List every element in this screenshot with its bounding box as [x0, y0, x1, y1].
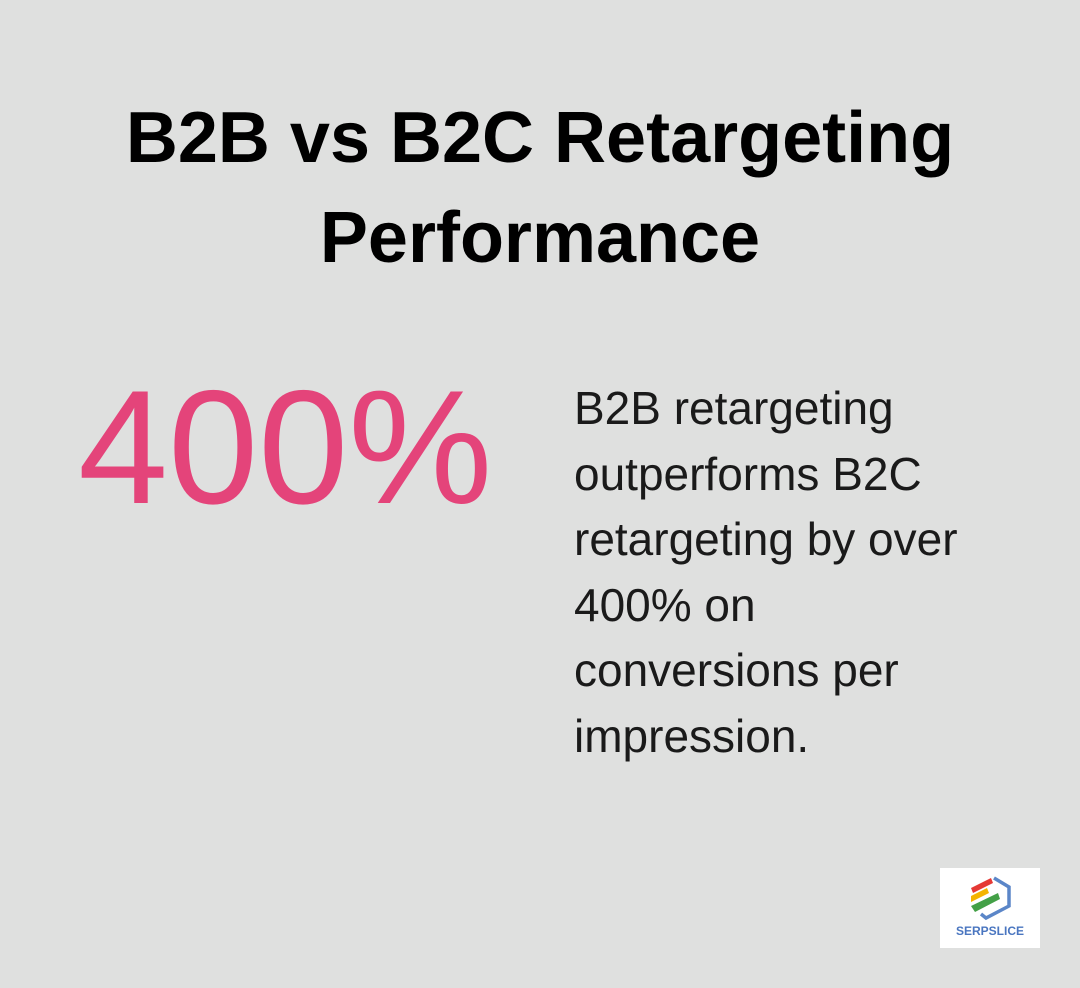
description text: conversions per: [574, 644, 899, 696]
title: B2B vs B2C Retargeting: [126, 98, 954, 178]
description text: outperforms B2C: [574, 448, 922, 500]
title: Performance: [320, 198, 760, 278]
logo: serpslice: [940, 868, 1040, 948]
description text: B2B retargeting: [574, 382, 894, 434]
description text: retargeting by over: [574, 513, 958, 565]
description text: [574, 382, 958, 762]
big statistic: 400%: [78, 357, 492, 538]
description text: 400% on: [574, 579, 756, 631]
description text: impression.: [574, 710, 809, 762]
logo: serpslice: SERPSLICE: [956, 924, 1024, 938]
title: [126, 98, 954, 278]
